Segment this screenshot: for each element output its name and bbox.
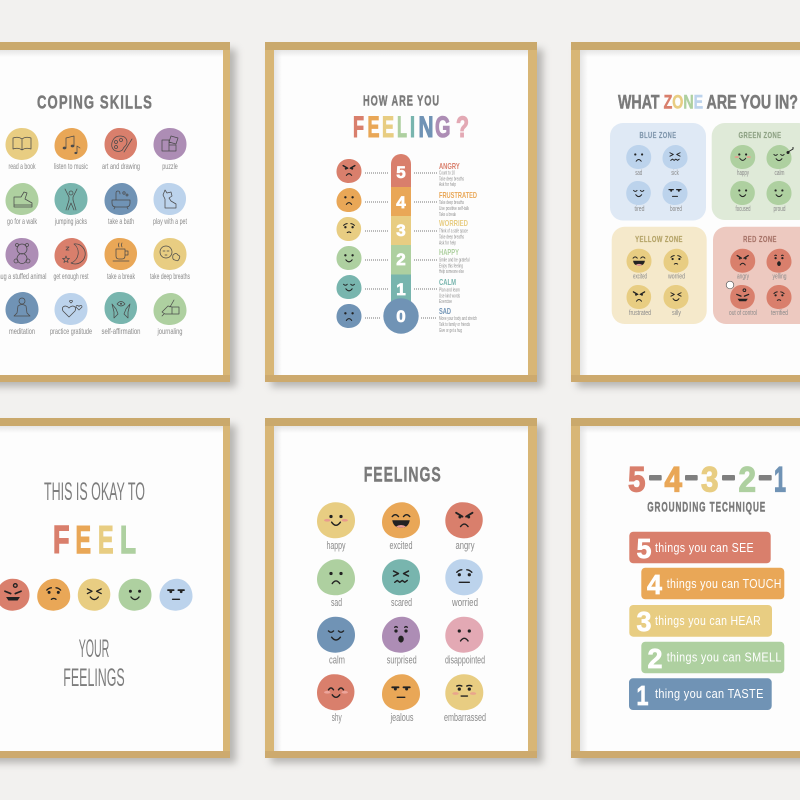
step: 3 hear (629, 605, 772, 637)
feeling: excited (382, 502, 420, 552)
feeling: angry: angry (456, 540, 475, 552)
panel: red zone: RED ZONE (743, 234, 777, 244)
panel: red zone: out of control (729, 310, 757, 317)
panel: feelings (317, 464, 486, 724)
text block: sad (439, 306, 477, 334)
step: 2 smell (641, 642, 784, 674)
icon: read a book (6, 128, 38, 160)
icon: listen to music (54, 128, 88, 160)
panel: yellow zone: excited (633, 274, 647, 280)
text block: happy: HAPPY (439, 247, 459, 257)
panel: green zone (712, 123, 800, 220)
face: frustrated (336, 188, 362, 212)
icon: play with a pet (154, 183, 186, 215)
text block: worried: Ask for help (439, 240, 456, 246)
text block: worried: WORRIED (439, 218, 468, 228)
face: sad (336, 304, 362, 328)
panel: green zone: happy (737, 170, 749, 177)
face: happy (336, 246, 362, 270)
chart: feelings thermometer: 2 (396, 250, 406, 269)
text block: worried (439, 218, 468, 246)
step: 3 hear: 3 (636, 606, 652, 637)
panel: blue zone: tired (634, 206, 645, 213)
icon: take deep breaths (154, 238, 186, 270)
feeling: scared (382, 559, 420, 609)
label: read a book: read a book (8, 161, 36, 171)
text block: angry: ANGRY (439, 161, 460, 171)
heading: feel (53, 519, 136, 562)
feeling: embarrassed: embarrassed (444, 712, 486, 724)
panel: okay to feel: YOUR (79, 635, 109, 663)
panel: green zone: proud (774, 206, 786, 213)
feeling: disappointed: disappointed (445, 654, 485, 666)
panel: coping skills (0, 92, 190, 336)
panel: red zone: angry (737, 274, 749, 280)
panel: grounding technique (628, 460, 786, 711)
text block: calm: Plan and learn (439, 288, 460, 294)
feeling: happy: happy (326, 540, 346, 552)
text block: angry: Take deep breaths (439, 176, 464, 182)
chart: feelings thermometer: 1 (396, 280, 406, 299)
text block: sad: Give or get a hug (439, 328, 462, 334)
step: 4 touch: 4 (647, 569, 662, 600)
feeling: embarrassed (444, 674, 486, 724)
heading: feel: E (76, 519, 91, 562)
panel: yellow zone: silly (672, 310, 681, 317)
step: 3 hear: things you can HEAR (655, 613, 761, 628)
text block: frustrated: Take deep breaths (439, 200, 464, 206)
chart: feelings thermometer: 5 (396, 163, 406, 182)
step: 1 taste (629, 678, 772, 711)
panel: okay to feel (0, 478, 192, 692)
panel: blue zone: BLUE ZONE (640, 130, 676, 140)
chart: feelings thermometer: 3 (396, 221, 406, 240)
poster frame: coping skills (0, 42, 236, 387)
text block: angry: Ask for help (439, 182, 456, 188)
feeling: shy: shy (332, 712, 342, 724)
step: 5 see: things you can SEE (655, 540, 754, 555)
label: journaling: journaling (157, 326, 183, 336)
poster frame: grounding technique (571, 418, 800, 763)
heading: feeling: ? (456, 111, 469, 144)
feeling: sad (317, 559, 355, 609)
heading: coping skills: COPING SKILLS (37, 92, 153, 112)
icon: meditation (6, 292, 39, 324)
heading: 5-4-3-2-1: 2 (738, 460, 756, 500)
face: worried (336, 217, 361, 241)
panel: green zone: GREEN ZONE (738, 130, 782, 140)
panel: blue zone: bored (670, 206, 682, 213)
step: 1 taste: thing you can TASTE (655, 686, 764, 701)
icon: art and drawing (104, 128, 137, 160)
chart: feelings thermometer: 0 (396, 307, 406, 326)
panel: yellow zone: frustrated (629, 310, 651, 317)
icon: take a break (104, 238, 137, 270)
face row (0, 579, 192, 611)
panel: red zone: yelling (772, 274, 787, 280)
icon: jumping jacks (54, 183, 88, 215)
feeling: excited: excited (390, 540, 412, 552)
icon: go for a walk (6, 183, 39, 215)
panel: blue zone: sick (671, 170, 679, 177)
label: art and drawing: art and drawing (102, 161, 140, 171)
text block: sad: Talk to family or friends (439, 322, 470, 328)
panel: red zone (713, 227, 800, 324)
text block: worried: Think of a safe space (439, 228, 468, 234)
heading: how are you: HOW ARE YOU (363, 92, 440, 110)
heading: 5-4-3-2-1: 1 (774, 460, 786, 500)
panel: blue zone: sad (635, 170, 642, 177)
label: listen to music: listen to music (54, 161, 88, 171)
label: play with a pet: play with a pet (153, 216, 187, 226)
feeling: disappointed (445, 617, 485, 666)
step: 1 taste: 1 (636, 680, 648, 711)
text block: sad: Move your body and stretch (439, 316, 477, 322)
text block: frustrated: Take a break (439, 212, 456, 218)
text block: happy: Smile and be grateful (439, 258, 470, 264)
feeling: angry (445, 502, 483, 552)
panel: what zone are you in (610, 92, 800, 324)
label: get enough rest: get enough rest (54, 271, 89, 281)
heading: 5-4-3-2-1 (628, 460, 786, 500)
text block: frustrated (439, 190, 477, 218)
text block: frustrated: Use positive self-talk (439, 206, 469, 212)
feeling: shy (317, 674, 354, 724)
heading: feeling: G (435, 111, 450, 144)
icon: journaling (154, 293, 186, 325)
panel: green zone: calm (774, 170, 785, 177)
panel: how are you feeling (336, 92, 477, 334)
step: 2 smell: 2 (648, 643, 662, 674)
heading: feel: F (53, 519, 70, 562)
feeling: worried (445, 559, 483, 609)
heading: feeling: F (353, 111, 364, 144)
panel: red zone: terrified (771, 310, 788, 317)
panel: yellow zone: YELLOW ZONE (635, 234, 683, 244)
heading: feeling: N (418, 111, 434, 144)
heading: 5-4-3-2-1: 5 (628, 460, 646, 500)
heading: 5-4-3-2-1: 3 (701, 460, 718, 500)
text block: happy: Help someone else (439, 269, 464, 275)
icon: practice gratitude (54, 293, 88, 325)
chart: feelings thermometer: 4 (396, 193, 406, 212)
text block: happy: Enjoy this feeling (439, 264, 463, 270)
feeling: sad: sad (331, 597, 342, 609)
heading: feel: L (120, 519, 136, 562)
label: jumping jacks: jumping jacks (54, 216, 87, 226)
step: 5 see: 5 (636, 533, 652, 564)
icon: take a bath (104, 183, 138, 215)
panel: yellow zone: worried (667, 274, 685, 280)
text block: frustrated: FRUSTRATED (439, 190, 477, 200)
heading: 5-4-3-2-1: 4 (664, 460, 682, 500)
text block: calm: Use kind words (439, 294, 460, 300)
feeling: surprised (382, 617, 420, 666)
feeling: calm: calm (329, 654, 345, 666)
feeling: jealous: jealous (390, 712, 414, 724)
heading: feelings: FEELINGS (364, 464, 442, 486)
face: calm (336, 275, 362, 299)
text block: calm: Exercise (439, 299, 452, 305)
label: take a break: take a break (107, 271, 135, 281)
heading: feeling: I (410, 111, 415, 144)
text block: calm: CALM (439, 277, 456, 287)
icon: self-affirmation (104, 292, 137, 324)
poster frame: what zone (571, 42, 800, 387)
feeling: surprised: surprised (387, 654, 417, 666)
label: practice gratitude: practice gratitude (50, 326, 92, 336)
step: 5 see (629, 532, 771, 564)
heading: feel: E (98, 519, 114, 562)
text block: calm (439, 277, 460, 305)
poster frame: how are you feeling (265, 42, 543, 387)
heading: feeling: E (368, 111, 380, 144)
heading: feeling (353, 111, 469, 144)
text block: worried: Take deep breaths (439, 234, 464, 240)
feeling: happy (317, 502, 355, 552)
text block: sad: SAD (439, 306, 451, 316)
panel: okay to feel: THIS IS OKAY TO (44, 478, 145, 506)
dotted connectors (365, 173, 437, 318)
face: angry (336, 159, 362, 183)
text block: angry: Count to 10 (439, 170, 455, 176)
heading: feeling: L (397, 111, 407, 144)
label: self-affirmation: self-affirmation (102, 326, 141, 336)
text block: happy (439, 247, 470, 275)
panel: green zone: focused (736, 206, 751, 213)
chart: feelings thermometer (383, 154, 419, 334)
feeling: scared: scared (391, 597, 412, 609)
label: meditation: meditation (9, 326, 35, 336)
text block: angry (439, 161, 464, 188)
heading: feeling: E (382, 111, 394, 144)
panel: blue zone (610, 123, 706, 220)
feeling: worried: worried (451, 597, 478, 609)
label: take a bath: take a bath (108, 216, 134, 226)
icon: get enough rest (54, 238, 88, 270)
poster frame: feelings (265, 418, 543, 763)
panel: okay to feel: FEELINGS (63, 664, 125, 692)
label: puzzle: puzzle (162, 161, 178, 171)
label: go for a walk: go for a walk (7, 216, 37, 226)
label: take deep breaths: take deep breaths (150, 271, 190, 281)
poster frame: okay to feel (0, 418, 236, 763)
icon: puzzle (154, 128, 186, 160)
icon: hug a stuffed animal (6, 238, 38, 270)
feeling: jealous (382, 674, 420, 724)
step: 4 touch (641, 568, 784, 600)
panel: yellow zone (612, 227, 707, 324)
feeling: calm (317, 617, 355, 666)
